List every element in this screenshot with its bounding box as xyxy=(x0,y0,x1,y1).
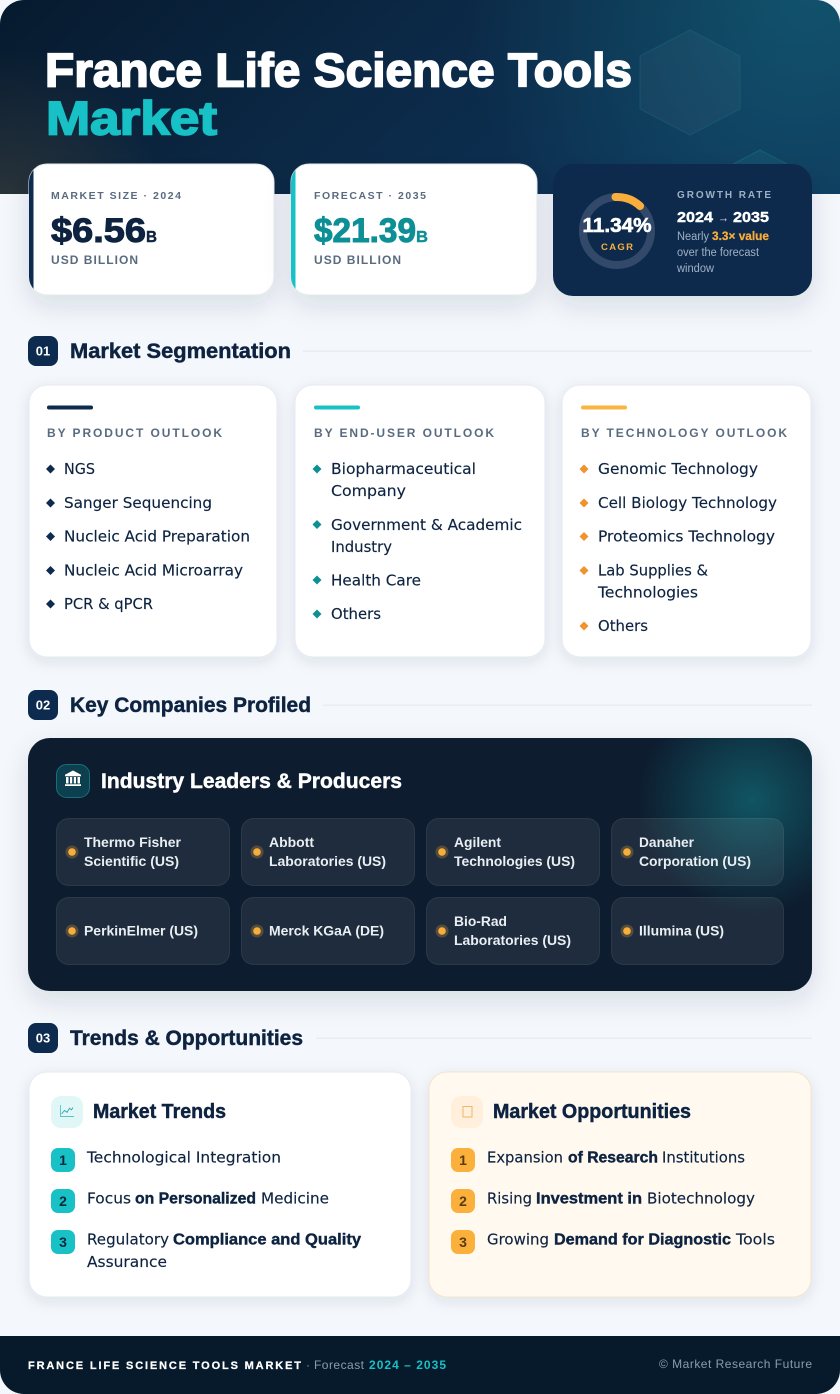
opportunity 2: Biotechnology xyxy=(647,1190,755,1208)
panel: market opportunities xyxy=(429,1072,811,1297)
panel: by end-user outlook: BY END-USER OUTLOOK xyxy=(314,426,494,440)
stat card: market size 2024 xyxy=(29,164,274,295)
panel: market opportunities: Market Opportunities xyxy=(493,1101,691,1123)
company: Bio-Rad Laboratories: Laboratories (US) xyxy=(454,932,571,948)
end-user list: Company xyxy=(331,482,406,500)
end-user list: Others xyxy=(331,605,381,623)
stat card: forecast 2035: $21.39 xyxy=(314,212,416,250)
end-user list: Government & Academic xyxy=(331,516,522,534)
stat card: market size 2024: $6.56 xyxy=(51,212,146,250)
company: Merck KGaA xyxy=(242,898,414,964)
header banner xyxy=(0,0,840,194)
opportunity 1: 1 xyxy=(459,1152,467,1168)
opportunity 2: Rising xyxy=(487,1190,532,1208)
growth rate text: over the forecast xyxy=(677,247,760,259)
title xyxy=(45,44,632,144)
company: Agilent Technologies xyxy=(426,818,600,886)
opportunity 3: Tools xyxy=(735,1230,775,1248)
donut chart: CAGR: 11.34% xyxy=(582,215,652,237)
icon: line chart xyxy=(51,1096,83,1128)
company: Agilent Technologies: Technologies (US) xyxy=(454,853,575,869)
trend 3: Assurance xyxy=(87,1253,167,1271)
company: Abbott Laboratories: Abbott xyxy=(269,834,314,850)
technology list: Lab Supplies & xyxy=(598,562,708,580)
section heading 02 xyxy=(28,690,812,720)
technology list: Cell Biology Technology xyxy=(598,494,777,512)
company: Thermo Fisher Scientific: Scientific (US) xyxy=(84,853,179,869)
stat card: forecast 2035: B xyxy=(416,229,428,246)
donut chart: CAGR: CAGR xyxy=(601,242,633,253)
company: PerkinElmer: PerkinElmer (US) xyxy=(84,922,198,938)
footer: FRANCE LIFE SCIENCE TOOLS MARKET xyxy=(28,1360,301,1372)
end-user list xyxy=(312,460,522,623)
opportunity 3: Growing xyxy=(487,1230,549,1248)
title: France Life Science Tools xyxy=(45,44,632,96)
panel: by technology outlook xyxy=(562,385,811,657)
section heading 01: 01 xyxy=(36,344,50,358)
trend 2: 2 xyxy=(59,1193,67,1209)
growth rate text: 2024 xyxy=(677,210,713,226)
trend 2: Medicine xyxy=(261,1190,329,1208)
opportunity 1: Expansion xyxy=(487,1148,563,1166)
trend 3: Regulatory xyxy=(87,1230,169,1248)
company: Thermo Fisher Scientific xyxy=(56,818,230,886)
company: Danaher Corporation xyxy=(612,818,784,886)
panel: market trends xyxy=(29,1072,411,1297)
stat card: market size 2024: USD BILLION xyxy=(51,253,138,267)
trend 1: Technological Integration xyxy=(86,1148,281,1166)
opportunity 1 xyxy=(451,1148,745,1172)
growth rate text xyxy=(676,190,771,275)
trend 3: Compliance and Quality xyxy=(173,1232,361,1248)
growth rate text: → xyxy=(718,210,729,225)
section heading 03: 03 xyxy=(36,1030,50,1046)
stat card: market size 2024: MARKET SIZE · 2024 xyxy=(51,190,181,202)
footer: © Market Research Future xyxy=(659,1357,812,1371)
growth rate text: window xyxy=(676,263,715,275)
opportunity 2: Investment in xyxy=(536,1190,642,1208)
panel: by end-user outlook xyxy=(295,385,545,657)
panel: market trends: Market Trends xyxy=(93,1101,226,1123)
icon: placeholder glyph xyxy=(451,1096,483,1128)
opportunity 2: 2 xyxy=(459,1193,467,1209)
opportunity 1: Institutions xyxy=(662,1148,745,1166)
company: PerkinElmer xyxy=(56,898,230,964)
panel: industry leaders and producers xyxy=(28,738,812,991)
company: Agilent Technologies: Agilent xyxy=(454,834,501,850)
footer: Forecast xyxy=(314,1358,365,1372)
footer: · xyxy=(306,1358,310,1372)
product list: Sanger Sequencing xyxy=(64,494,212,512)
footer: 2024 – 2035 xyxy=(369,1358,446,1372)
title: Market xyxy=(46,92,217,144)
end-user list: Health Care xyxy=(331,572,421,590)
stat card: forecast 2035: FORECAST · 2035 xyxy=(314,190,426,202)
section heading 01 xyxy=(28,336,812,366)
trend 3 xyxy=(51,1230,361,1271)
company: Abbott Laboratories xyxy=(242,818,414,886)
opportunity 3: 3 xyxy=(459,1234,467,1250)
panel: by product outlook xyxy=(29,385,277,657)
opportunity 3 xyxy=(451,1230,775,1254)
section heading 03 xyxy=(28,1023,812,1053)
growth rate text: 2035 xyxy=(733,210,769,226)
end-user list: Biopharmaceutical xyxy=(331,460,476,478)
company: Merck KGaA: Merck KGaA (DE) xyxy=(269,922,384,938)
product list: NGS xyxy=(64,460,95,478)
opportunity 3: Demand for Diagnostic xyxy=(554,1232,731,1248)
company: Thermo Fisher Scientific: Thermo Fisher xyxy=(84,834,182,850)
company: Bio-Rad Laboratories: Bio-Rad xyxy=(454,913,507,929)
technology list: Technologies xyxy=(597,584,698,602)
growth rate text: Nearly xyxy=(677,231,709,243)
stat card: forecast 2035: USD BILLION xyxy=(314,253,401,267)
panel: by product outlook: BY PRODUCT OUTLOOK xyxy=(47,426,222,440)
growth rate text: GROWTH RATE xyxy=(677,190,771,201)
trend 2 xyxy=(51,1189,329,1213)
trend 2: on Personalized xyxy=(135,1190,256,1208)
product list: PCR & qPCR xyxy=(64,595,153,613)
stat card: growth rate xyxy=(553,164,812,296)
trend 2: Focus xyxy=(87,1190,131,1208)
stat card: market size 2024: B xyxy=(146,229,157,246)
section heading 02: Key Companies Profiled xyxy=(70,694,311,717)
company: Danaher Corporation: Danaher xyxy=(639,834,695,850)
technology list: Genomic Technology xyxy=(598,460,758,478)
product list: Nucleic Acid Preparation xyxy=(64,528,250,546)
section heading 03: Trends & Opportunities xyxy=(70,1027,303,1050)
trend 3: 3 xyxy=(59,1234,67,1250)
icon: institution building xyxy=(56,764,90,798)
company: Illumina xyxy=(612,898,784,964)
stat card: forecast 2035 xyxy=(291,164,537,295)
growth rate text: 3.3× value xyxy=(712,231,769,243)
technology list: Others xyxy=(598,617,648,635)
end-user list: Industry xyxy=(331,538,392,556)
trend 1: 1 xyxy=(59,1152,67,1168)
section heading 02: 02 xyxy=(36,698,50,712)
company: Illumina: Illumina (US) xyxy=(639,922,724,938)
company: Bio-Rad Laboratories xyxy=(426,898,600,964)
panel: by technology outlook: BY TECHNOLOGY OUTLOOK xyxy=(581,426,787,440)
opportunity 2 xyxy=(451,1189,755,1213)
product list: Nucleic Acid Microarray xyxy=(64,562,243,580)
trend 1 xyxy=(51,1148,281,1172)
panel: industry leaders and producers: Industry Leaders & Producers xyxy=(101,770,402,793)
product list xyxy=(46,460,250,613)
technology list xyxy=(580,460,777,635)
company: Abbott Laboratories: Laboratories (US) xyxy=(269,853,386,869)
donut chart: CAGR xyxy=(582,197,652,265)
company: Danaher Corporation: Corporation (US) xyxy=(639,853,751,869)
technology list: Proteomics Technology xyxy=(598,528,775,546)
opportunity 1: of Research xyxy=(568,1150,658,1166)
footer xyxy=(0,1336,840,1394)
section heading 01: Market Segmentation xyxy=(70,340,291,363)
